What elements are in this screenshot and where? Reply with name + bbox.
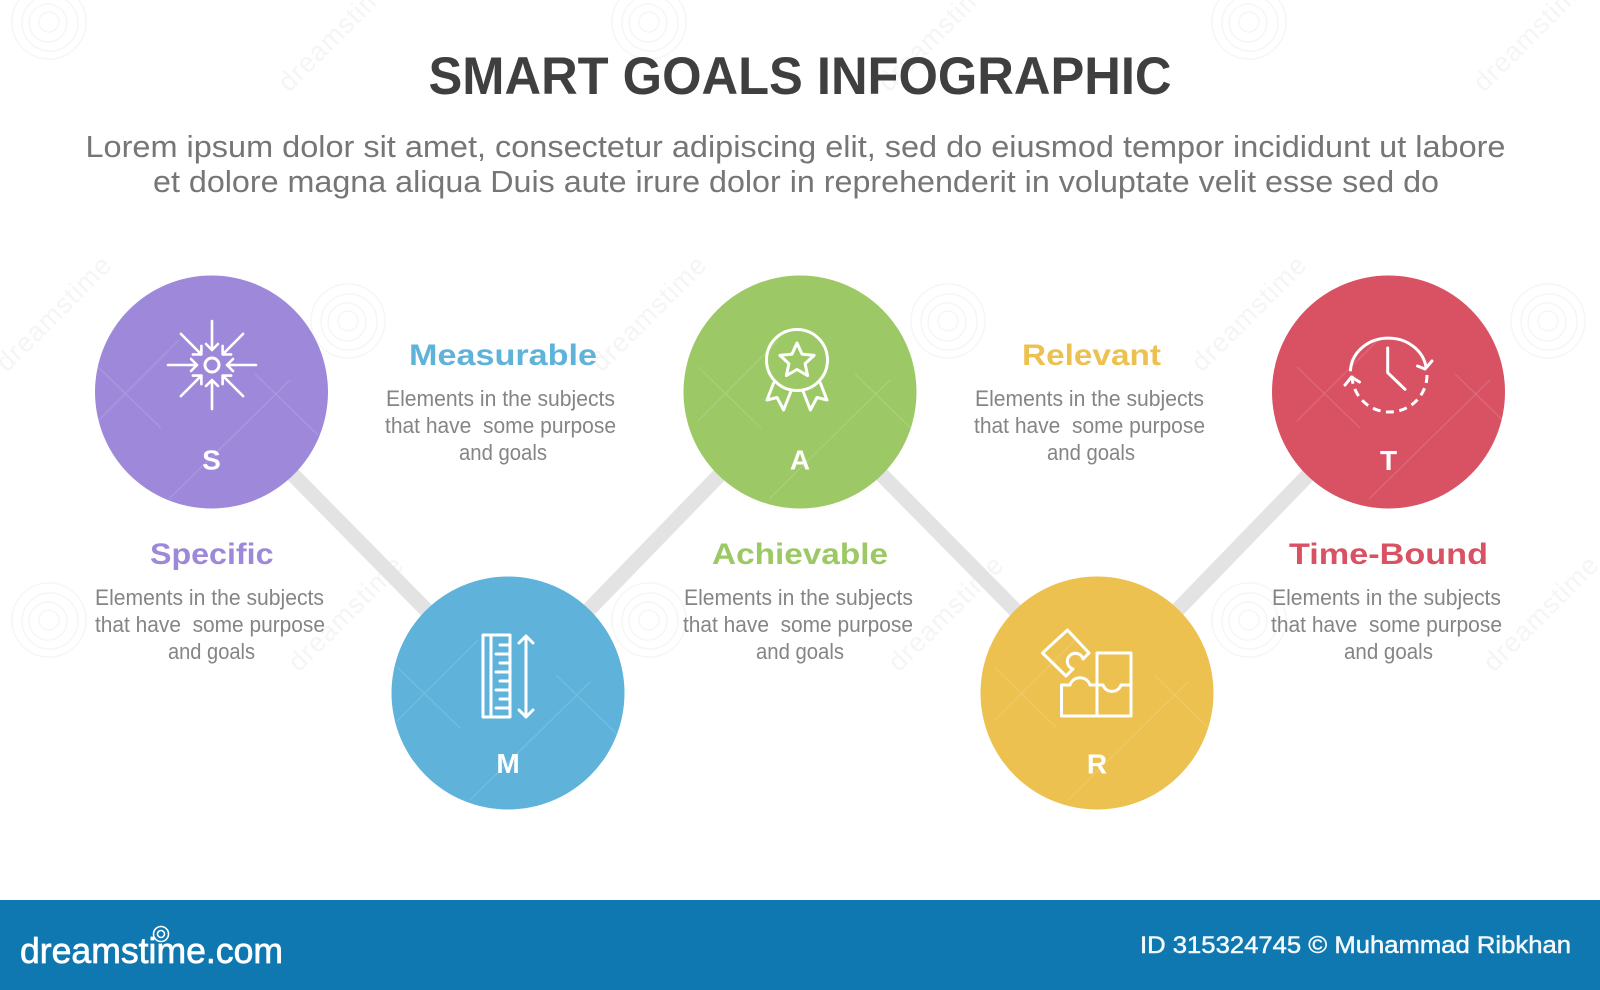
step S: specific circle: [95, 276, 328, 508]
letter S: S: [202, 444, 221, 476]
text block: relevant: Relevant: [1022, 339, 1161, 372]
text block: achievable: that have some purpose: [683, 612, 913, 637]
text block: specific: that have some purpose: [95, 612, 325, 637]
subtitle text block: Lorem ipsum dolor sit amet, consectetur adipiscing elit, sed do eiusmod tempor incididunt ut labore: [86, 129, 1506, 164]
title: SMART GOALS INFOGRAPHIC: [428, 47, 1172, 106]
icon: ruler and double arrow: [483, 635, 533, 717]
text block: time-bound: Time-Bound: [1289, 538, 1488, 571]
text block: relevant: Elements in the subjects: [975, 386, 1204, 411]
step T: time-bound circle: [1272, 276, 1518, 508]
text block: measurable: and goals: [459, 440, 547, 465]
letter M: M: [496, 748, 520, 779]
icon: arrows converging on target: [168, 321, 256, 409]
text block: relevant: [974, 339, 1205, 465]
image id and credit: ID 315324745 © Muhammad Ribkhan: [1140, 932, 1571, 959]
text block: measurable: Measurable: [409, 339, 597, 372]
text block: measurable: Elements in the subjects: [386, 386, 615, 411]
letter A: A: [790, 444, 810, 476]
text block: relevant: and goals: [1047, 440, 1135, 465]
text block: measurable: [385, 339, 616, 465]
zigzag connector lines: [212, 392, 1388, 693]
letter T: T: [1380, 445, 1397, 476]
logo: dreamstime wordmark: dreamstime.com: [20, 930, 283, 971]
step A: achievable circle: [684, 276, 918, 508]
text block: achievable: Elements in the subjects: [684, 585, 913, 610]
text block: achievable: and goals: [756, 639, 844, 664]
text block: specific: Elements in the subjects: [95, 585, 324, 610]
text block: measurable: that have some purpose: [385, 413, 616, 438]
text block: time-bound: Elements in the subjects: [1272, 585, 1501, 610]
footer bar: [0, 900, 1600, 990]
text: dreamstime: [585, 250, 712, 377]
text: dreamstime: [282, 550, 409, 677]
text block: time-bound: and goals: [1344, 639, 1433, 664]
text block: achievable: [683, 538, 913, 664]
step M: measurable circle: [392, 576, 624, 810]
text block: time-bound: that have some purpose: [1271, 612, 1502, 637]
text block: time-bound: [1271, 538, 1502, 664]
text: dreamstime: [1185, 250, 1312, 377]
subtitle text block: et dolore magna aliqua Duis aute irure dolor in reprehenderit in voluptate velit esse sed do: [153, 164, 1439, 199]
letter R: R: [1087, 748, 1107, 780]
icon: puzzle pieces: [1042, 630, 1131, 716]
icon: clock with circular arrows: [1345, 338, 1432, 412]
text block: specific: [95, 538, 325, 664]
icon: award ribbon with star: [766, 330, 828, 410]
step R: relevant circle: [980, 576, 1217, 810]
text block: achievable: Achievable: [712, 538, 888, 571]
text block: specific: and goals: [168, 639, 255, 664]
text: dreamstime: [882, 550, 1009, 677]
subtitle text block: [86, 129, 1506, 199]
text block: specific: Specific: [150, 538, 274, 571]
text block: relevant: that have some purpose: [974, 413, 1205, 438]
